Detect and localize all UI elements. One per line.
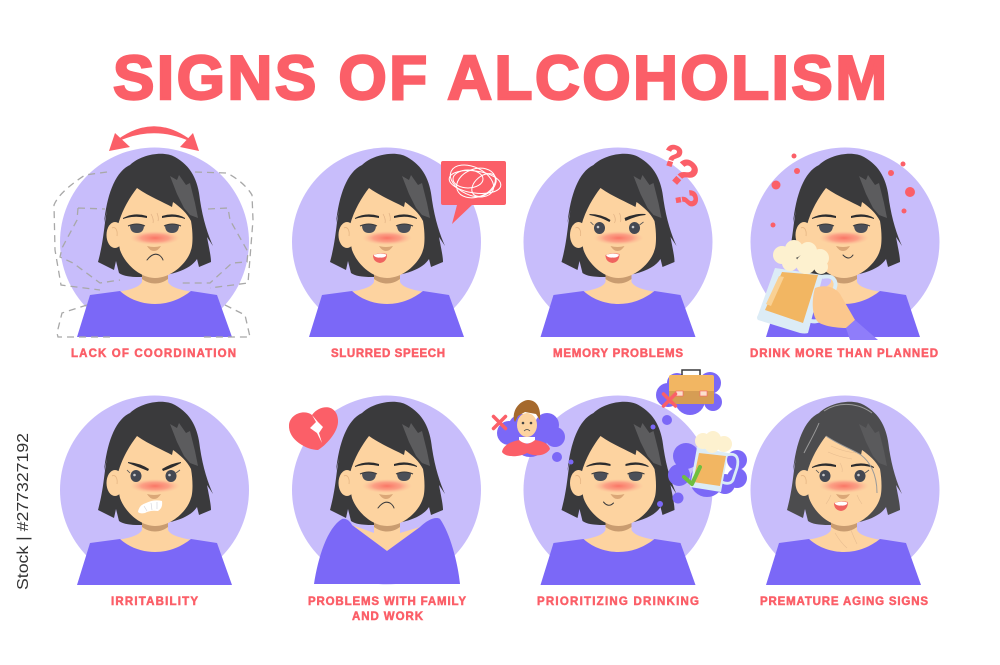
thought cloud: beer with check mark bbox=[668, 431, 747, 497]
older woman bbox=[766, 402, 921, 585]
panel: prioritizing drinking bbox=[494, 370, 747, 608]
question marks: ? bbox=[659, 138, 686, 175]
thought cloud: boyfriend crossed out bbox=[494, 400, 565, 457]
circle background bbox=[750, 148, 940, 336]
panel: memory problems bbox=[524, 138, 712, 360]
label: PROBLEMS WITH FAMILY bbox=[308, 596, 466, 608]
label: DRINK MORE THAN PLANNED bbox=[750, 348, 938, 360]
label: MEMORY PROBLEMS bbox=[553, 348, 683, 360]
woman frowning bbox=[540, 154, 696, 337]
double-headed arrow bbox=[109, 127, 199, 151]
question marks: ? bbox=[668, 187, 704, 211]
woman smiling bbox=[766, 154, 920, 337]
stock id side text: Stock | #277327192 bbox=[15, 433, 32, 590]
circle background bbox=[524, 396, 712, 584]
circle background bbox=[524, 148, 712, 336]
label: AND WORK bbox=[352, 611, 424, 623]
circle background bbox=[292, 396, 481, 584]
thought cloud: briefcase crossed out bbox=[656, 370, 722, 415]
panel: premature aging signs bbox=[750, 396, 940, 608]
icon: broken heart bbox=[289, 407, 338, 450]
label: SLURRED SPEECH bbox=[331, 348, 445, 360]
panel: problems with family and work bbox=[289, 396, 481, 623]
woman with sad face bbox=[77, 154, 232, 337]
woman speaking bbox=[309, 154, 464, 337]
woman with raised shoulders bbox=[314, 402, 460, 584]
circle background bbox=[60, 396, 249, 584]
panel: drink more than planned bbox=[750, 148, 940, 360]
question marks bbox=[659, 138, 706, 211]
panel: lack of coordination bbox=[54, 127, 253, 360]
woman smiling bbox=[540, 402, 696, 585]
circle background bbox=[60, 148, 249, 336]
thought dots bbox=[552, 415, 684, 507]
speech bubble with scribble bbox=[441, 159, 506, 224]
panel: irritability bbox=[60, 396, 249, 608]
label: IRRITABILITY bbox=[111, 596, 198, 608]
woman angry bbox=[77, 402, 232, 585]
dashed ghost outlines bbox=[54, 172, 253, 337]
label: PREMATURE AGING SIGNS bbox=[760, 596, 928, 608]
title: SIGNS OF ALCOHOLISM bbox=[113, 44, 887, 113]
panel: slurred speech bbox=[292, 148, 506, 360]
question marks: ? bbox=[661, 150, 706, 197]
label: PRIORITIZING DRINKING bbox=[537, 596, 699, 608]
circle background bbox=[292, 148, 481, 336]
beer mug and hand bbox=[757, 240, 878, 340]
label: LACK OF COORDINATION bbox=[71, 348, 236, 360]
circle background bbox=[750, 396, 940, 584]
bubbles / dots bbox=[770, 154, 915, 228]
label bbox=[308, 596, 466, 623]
